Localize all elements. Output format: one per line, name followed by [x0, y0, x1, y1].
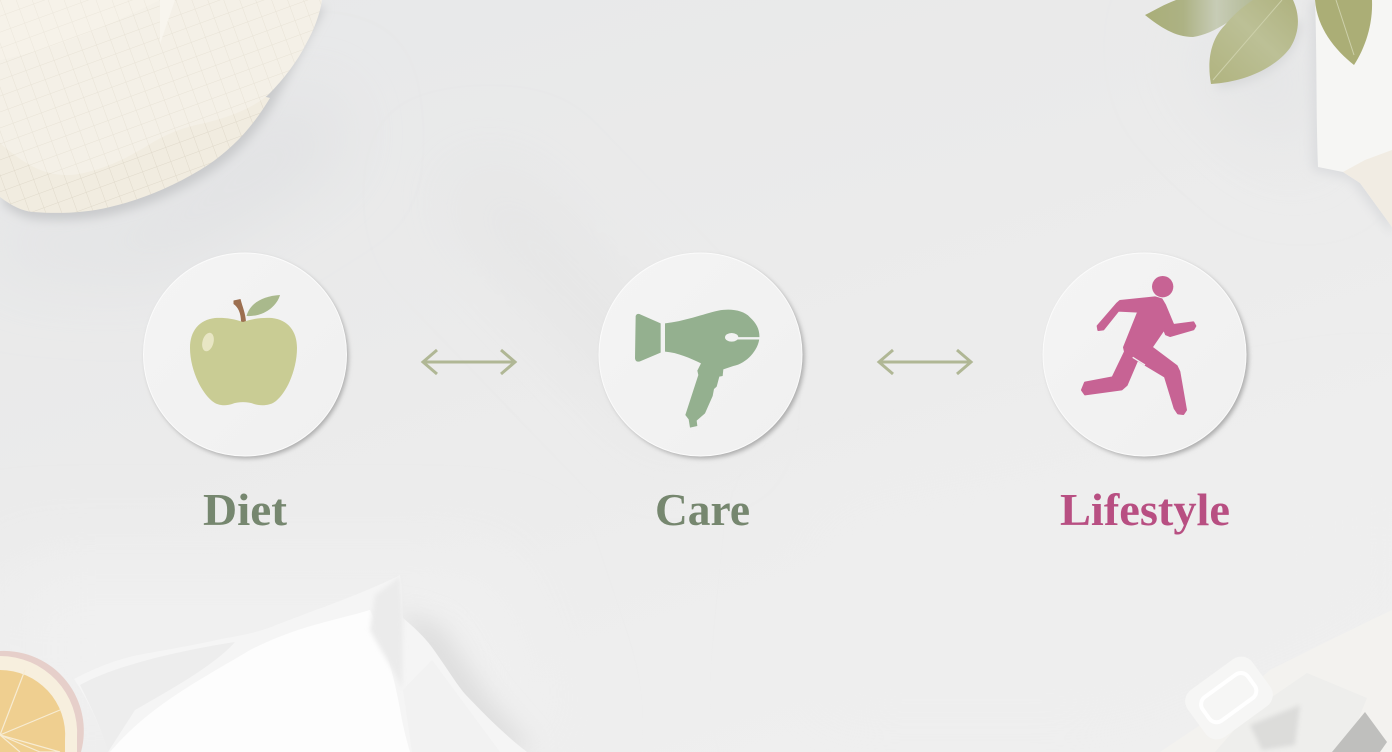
- arrow: care to lifestyle: [879, 350, 971, 374]
- label: Diet: Diet: [203, 484, 288, 535]
- panel: diet: [144, 253, 348, 535]
- leaf right: [1315, 0, 1372, 65]
- decoration: towel top right: [1310, 0, 1392, 235]
- panel: lifestyle: [1043, 253, 1248, 535]
- leaf left: [1145, 0, 1255, 37]
- panel: care: [599, 253, 804, 535]
- icon: hair dryer: [635, 310, 760, 428]
- disc: care: [599, 253, 804, 458]
- decoration: linen hat top left: [0, 0, 325, 220]
- arrow: diet to care: [423, 350, 515, 374]
- leaf middle: [1209, 0, 1298, 84]
- disc: lifestyle: [1043, 253, 1248, 458]
- icon: apple: [190, 295, 297, 405]
- soap: [1180, 651, 1278, 745]
- label: Lifestyle: Lifestyle: [1060, 484, 1230, 535]
- disc: diet: [144, 253, 348, 458]
- label: Care: Care: [655, 484, 750, 535]
- decoration: white cloth bottom centre: [74, 575, 535, 752]
- icon: runner: [1082, 276, 1195, 414]
- decoration: lemon slice bottom left: [0, 651, 84, 752]
- decoration: leaves top right: [1145, 0, 1372, 88]
- decoration: soap and towel bottom right: [1160, 610, 1392, 752]
